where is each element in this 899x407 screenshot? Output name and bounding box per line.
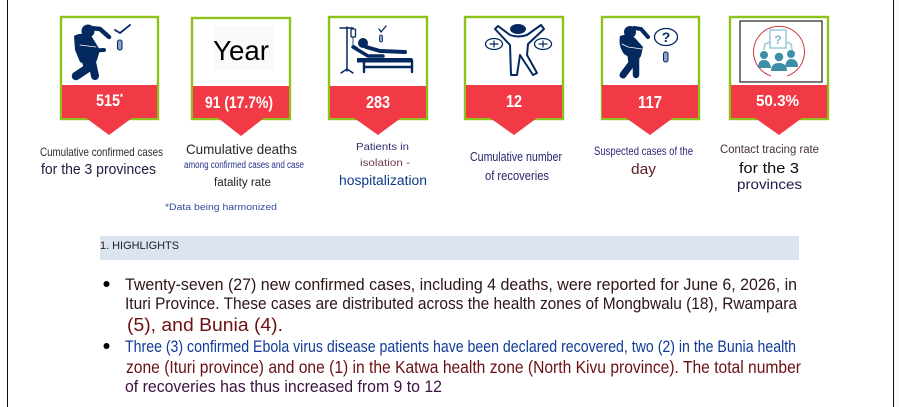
card: patients in isolation xyxy=(329,17,427,135)
label: cumulative confirmed cases: Cumulative confirmed cases xyxy=(40,145,163,159)
icon: coughing person with check and thermometer xyxy=(74,24,130,76)
value: 515: 515 xyxy=(96,91,124,110)
heading: highlights bar: 1. HIGHLIGHTS xyxy=(100,240,179,252)
heading: highlights bar xyxy=(100,236,799,260)
label: cumulative number of recoveries: Cumulative number xyxy=(470,150,562,164)
bullet text: new confirmed cases xyxy=(104,275,797,335)
value: 117: 117 xyxy=(638,92,662,112)
label: contact tracing rate for the 3 provinces: provinces xyxy=(737,177,802,192)
label: cumulative deaths: fatality rate xyxy=(214,177,271,189)
value: 91 (17.7%): 91 (17.7%) xyxy=(205,93,273,112)
footnote: data being harmonized: *Data being harmonized xyxy=(165,202,277,213)
icon: coughing person with question mark xyxy=(620,26,678,75)
bullet text: new confirmed cases: Twenty-seven (27) new confirmed cases, including 4 deaths, were reported for June 6, 2026, in xyxy=(125,275,797,294)
label: suspected cases of the day xyxy=(594,144,693,178)
value: 50.3%: 50.3% xyxy=(756,93,799,110)
label: cumulative deaths xyxy=(184,141,304,189)
label: contact tracing rate for the 3 provinces: Contact tracing rate xyxy=(720,144,819,156)
value: 12: 12 xyxy=(506,91,522,111)
label: cumulative number of recoveries xyxy=(470,150,562,183)
card: suspected cases xyxy=(602,17,699,135)
icon: contact tracing group with question board: ? xyxy=(774,33,782,47)
value: 515: * xyxy=(120,92,123,102)
bullet text: recoveries xyxy=(104,337,801,396)
card: cumulative deaths xyxy=(192,18,290,136)
label: suspected cases of the day: Suspected cases of the xyxy=(594,144,693,158)
label: contact tracing rate for the 3 provinces xyxy=(720,144,819,192)
label: patients in isolation - hospitalization: isolation - xyxy=(360,157,411,169)
label: cumulative deaths: among confirmed cases and case xyxy=(184,160,304,171)
card: cumulative confirmed cases xyxy=(61,17,158,135)
label: suspected cases of the day: day xyxy=(631,161,657,178)
card: contact tracing rate xyxy=(730,17,828,135)
label: patients in isolation - hospitalization: Patients in xyxy=(356,141,409,153)
bullet text: recoveries: of recoveries has thus increased from 9 to 12 xyxy=(125,377,442,396)
label: cumulative confirmed cases xyxy=(40,145,163,178)
label: patients in isolation - hospitalization xyxy=(339,141,427,188)
text: Year: Year xyxy=(213,35,269,66)
bullet text: new confirmed cases: (5), and Bunia (4). xyxy=(127,315,283,335)
icon: patient in hospital bed with IV drip xyxy=(340,26,412,73)
icon glyph: question mark: ? xyxy=(662,29,670,45)
label: cumulative number of recoveries: of recoveries xyxy=(485,169,549,183)
card: recoveries xyxy=(465,17,563,135)
value: 283: 283 xyxy=(366,92,390,112)
label: patients in isolation - hospitalization: hospitalization xyxy=(339,173,427,188)
bullet text: new confirmed cases: Ituri Province. These cases are distributed across the health zones of Mongbwalu (18), Rwampara xyxy=(125,294,797,313)
label: cumulative confirmed cases: for the 3 provinces xyxy=(41,162,156,178)
label: cumulative deaths: Cumulative deaths xyxy=(186,141,297,157)
bullet text: recoveries: zone (Ituri province) and one (1) in the Katwa health zone (North Kivu province). The total number xyxy=(126,357,801,377)
icon: recovered person with plus signs xyxy=(486,24,552,75)
label: contact tracing rate for the 3 provinces: for the 3 xyxy=(739,161,799,177)
